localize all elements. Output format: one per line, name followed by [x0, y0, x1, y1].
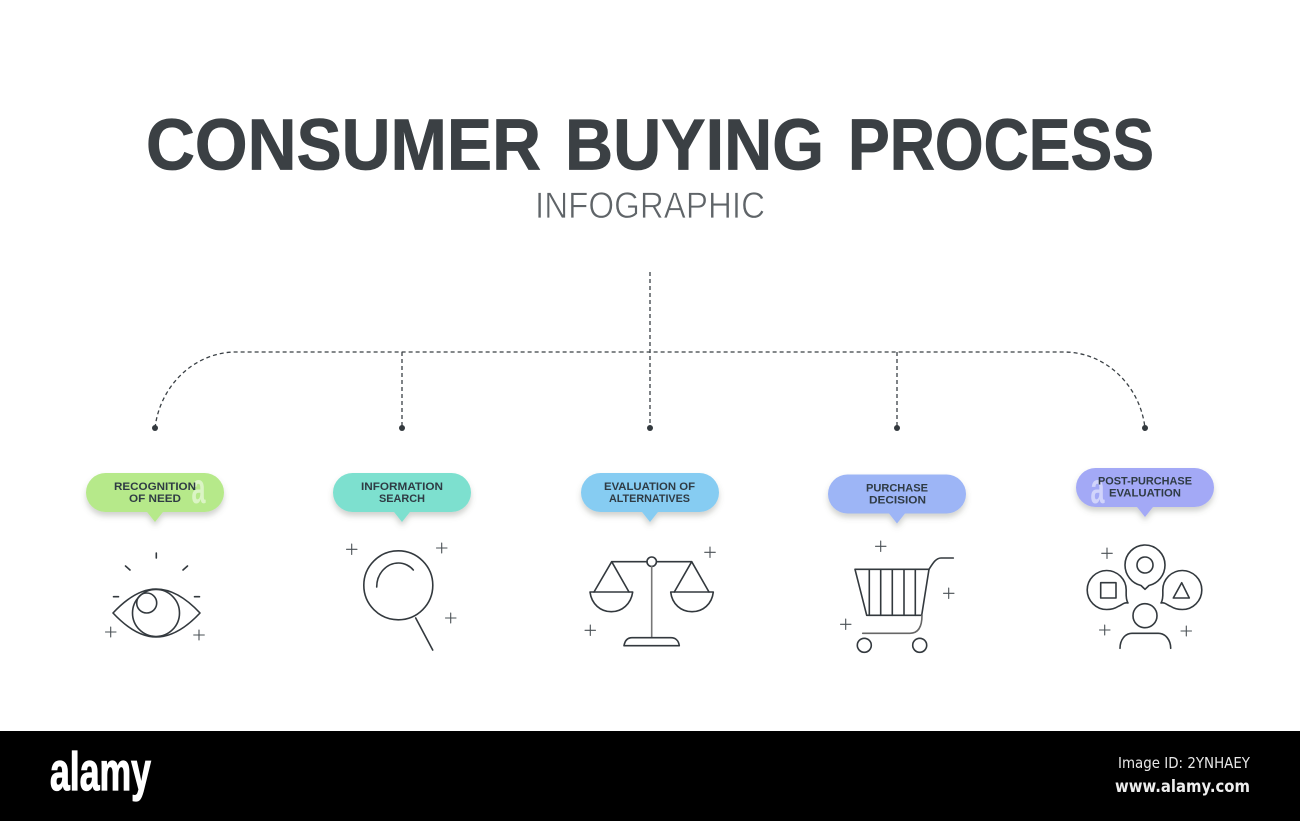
- label: information search: INFORMATION: [361, 481, 443, 493]
- icon: eye: [106, 553, 204, 640]
- label: evaluation of alternatives: ALTERNATIVES: [609, 493, 690, 505]
- label: information search: [333, 473, 471, 522]
- label: post-purchase evaluation: [1076, 465, 1214, 517]
- label: recognition of need: a: [192, 465, 206, 513]
- label: purchase decision: [828, 474, 966, 524]
- title: BUYING: [565, 106, 824, 186]
- label: post-purchase evaluation: EVALUATION: [1109, 488, 1181, 500]
- title: [146, 106, 1154, 186]
- label: purchase decision: DECISION: [869, 494, 926, 506]
- footer website: www.alamy.com: [1115, 777, 1250, 797]
- icon: balance scale: [585, 547, 715, 646]
- label: purchase decision: PURCHASE: [866, 482, 928, 494]
- subtitle: INFOGRAPHIC: [535, 185, 765, 226]
- footer bar: [0, 731, 1300, 821]
- title: CONSUMER: [146, 106, 541, 186]
- label: evaluation of alternatives: [581, 473, 719, 522]
- label: recognition of need: [86, 465, 224, 522]
- label: evaluation of alternatives: EVALUATION OF: [604, 481, 695, 493]
- icon: magnifying glass: [346, 543, 456, 650]
- label: information search: SEARCH: [379, 493, 425, 505]
- label: recognition of need: RECOGNITION: [114, 481, 196, 493]
- icon: shopping cart: [840, 541, 954, 652]
- dashed connector tree: [152, 272, 1148, 431]
- title: PROCESS: [848, 106, 1154, 186]
- icon: customer feedback: [1087, 545, 1202, 648]
- footer logo: alamy: [50, 742, 151, 802]
- label: recognition of need: OF NEED: [129, 493, 181, 505]
- label: post-purchase evaluation: POST-PURCHASE: [1098, 476, 1192, 488]
- label: post-purchase evaluation: a: [1090, 465, 1105, 513]
- footer image id: Image ID: 2YNHAEY: [1118, 754, 1251, 772]
